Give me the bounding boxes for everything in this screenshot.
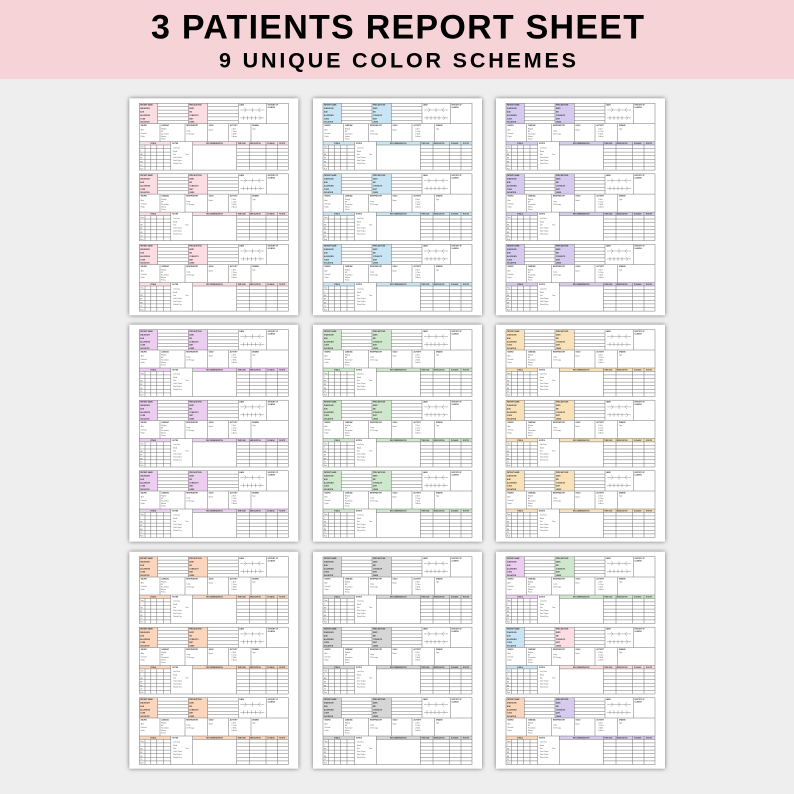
form: patient 1 <box>139 330 288 397</box>
sheet 2: blue scheme <box>313 98 482 315</box>
sheet 3: violet scheme <box>496 98 665 315</box>
form: patient 2 <box>139 174 288 241</box>
form: patient 3 <box>506 244 655 311</box>
form: patient 3 <box>139 698 288 765</box>
subtitle: 9 UNIQUE COLOR SCHEMES <box>219 48 576 72</box>
form: patient 1 <box>506 330 655 397</box>
sheet 5: green scheme <box>313 325 482 542</box>
form: patient 1 <box>139 103 288 170</box>
sheet 9: mixed scheme <box>496 552 665 769</box>
form: patient 2 <box>139 400 288 467</box>
sheet 7: peach scheme <box>129 552 298 769</box>
form: patient 3 <box>506 471 655 538</box>
sheet 8: gray scheme <box>313 552 482 769</box>
form: patient 2 <box>506 174 655 241</box>
form: patient 3 <box>139 244 288 311</box>
form: patient 1 <box>506 103 655 170</box>
form: patient 3 <box>323 698 472 765</box>
header banner <box>0 0 794 79</box>
form: patient 2 <box>139 627 288 694</box>
sheet 1: pink scheme <box>129 98 298 315</box>
form: patient 1 <box>323 557 472 624</box>
form: patient 3 <box>506 698 655 765</box>
form: patient 2 <box>323 400 472 467</box>
form: patient 1 <box>506 557 655 624</box>
form: patient 1 <box>323 330 472 397</box>
sheet 6: yellow scheme <box>496 325 665 542</box>
form: patient 3 <box>323 244 472 311</box>
form: patient 2 <box>323 174 472 241</box>
sheet 4: lilac scheme <box>129 325 298 542</box>
form: patient 3 <box>139 471 288 538</box>
form: patient 2 <box>506 627 655 694</box>
form: patient 1 <box>139 557 288 624</box>
form: patient 2 <box>506 400 655 467</box>
form: patient 3 <box>323 471 472 538</box>
form: patient 1 <box>323 103 472 170</box>
title: 3 PATIENTS REPORT SHEET <box>151 8 644 46</box>
form: patient 2 <box>323 627 472 694</box>
